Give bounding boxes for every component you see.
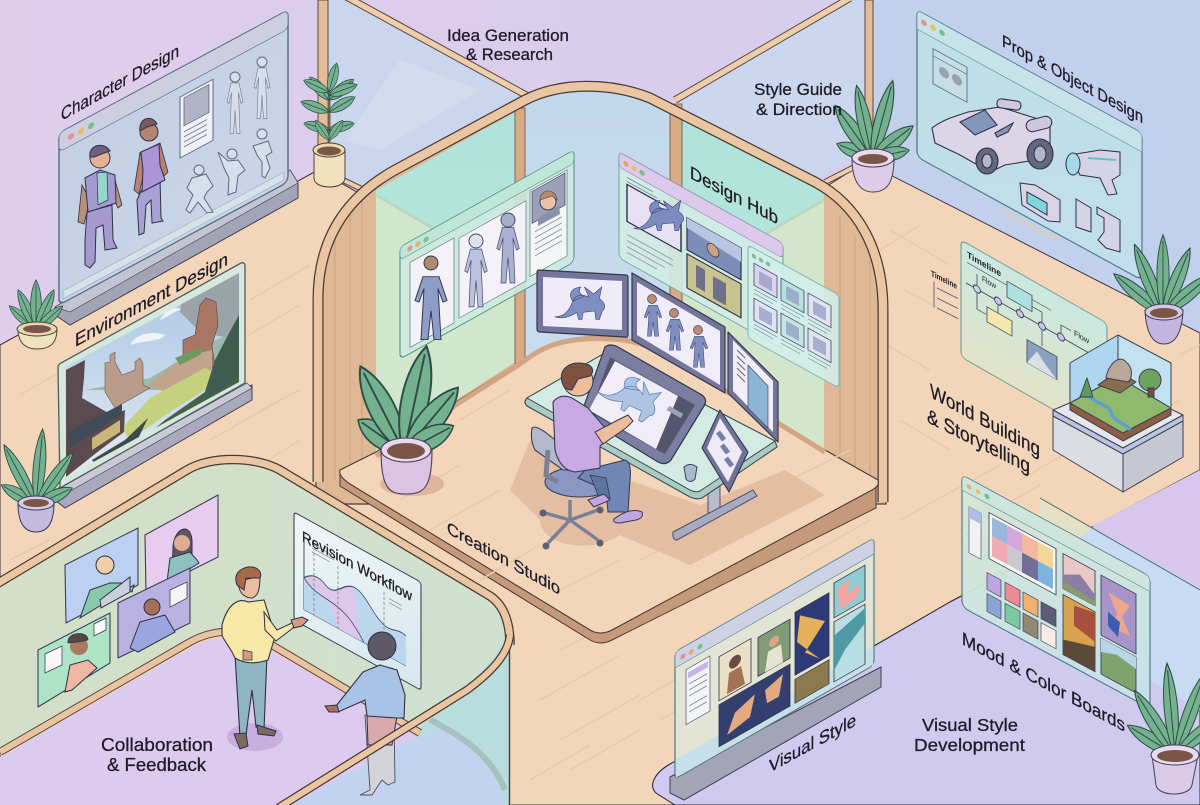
desk [525,353,777,540]
heading: collaboration and feedback [101,735,213,775]
panel: prop and object design [917,10,1142,280]
timeline note [931,268,958,320]
title: creation studio: Creation Studio [447,517,560,599]
profile card [180,79,213,158]
painting foreground buildings [66,360,125,477]
prop: handheld [1076,199,1120,252]
panel: visual style [670,538,881,800]
heading: style guide: & Direction [756,101,842,119]
person at drawing tablet [531,427,642,550]
room: collaboration [0,460,510,805]
heading: style guide [754,81,842,119]
thumbnail dragon [634,201,684,231]
title: character design: Character Design [61,41,179,126]
studio wall [316,82,886,504]
monitor: reference sheet [728,332,778,442]
glass right edge [508,640,510,805]
chair back [531,427,573,470]
panel: environment design [55,262,252,508]
panel: character design [55,10,298,325]
studio floor side [340,470,876,643]
monitor: dragon [537,270,628,337]
front floor seen through glass [285,730,505,805]
painting hills [86,336,239,390]
heading: idea generation: Idea Generation [447,27,569,45]
heading: visual style development: Development [914,735,1025,755]
hologram: storyboard panel [748,245,839,388]
top rim [0,460,510,645]
hologram: character sheets [400,150,574,359]
panel: timeline flow: Flow [982,274,997,291]
panel: timeline flow: Timeline [967,250,1002,280]
plant: right lavender pot [1110,235,1200,344]
desk leg [708,480,720,516]
title: mood and color boards: Mood & Color Boards [962,629,1125,737]
front glass [277,640,510,805]
floor: lavender corner [653,470,1200,805]
sketch figure 1 [415,256,447,340]
panel: timeline flow [931,240,1107,440]
room wall [0,462,508,750]
title: environment design: Environment Design [75,248,228,352]
painting meadow [122,368,214,440]
legs [578,460,630,512]
plant: fig tree [299,62,359,187]
tile: bearded man [118,568,190,658]
front rail top [278,635,510,805]
sketch figure 3 [497,213,519,283]
panel: mood and color boards [962,475,1150,709]
hill [1098,371,1136,393]
plant: left lavender pot [0,429,78,532]
plant: bottom right [1124,663,1200,794]
floor back rail [376,339,825,456]
plant: style guide [829,79,918,192]
painting dark hedge [156,375,239,428]
board title: Revision Workflow [302,528,412,605]
studio rim [318,86,883,502]
sketch figure 2 [465,234,487,307]
revision workflow board [294,512,421,690]
front rail [278,635,510,805]
monitor: character lineup [632,273,725,393]
tile: man with laptop [65,528,138,623]
heading: style guide: Style Guide [754,81,842,99]
character: girl [134,118,168,235]
studio floor [340,337,878,633]
centre glass [525,89,670,370]
plant: aloe [6,280,66,349]
chair base [545,500,598,543]
car [932,98,1053,174]
chair seat [545,467,615,497]
title: world building and storytelling: World Building [930,379,1040,462]
panel: timeline flow: Flow [1074,328,1090,346]
glass back [1070,335,1118,403]
back glass: mood boards [1040,498,1200,710]
desk tablet and cup [684,410,748,492]
person: presenter [222,567,308,751]
title: visual style: Visual Style [769,710,856,778]
heading: visual style development [914,715,1025,755]
floor shadow [510,440,825,565]
artwork details [729,652,741,671]
room floor [0,638,420,805]
prop: scanner [1020,183,1060,222]
base [55,170,298,325]
painting forest [205,315,239,395]
title: world building and storytelling: & Storytelling [927,405,1030,478]
prop: camera [1066,150,1120,195]
heading: idea generation: & Research [466,46,553,64]
painting rock [180,273,239,338]
person upper body [553,363,633,472]
painting left castle [105,352,150,408]
diorama [1053,335,1183,492]
glass posts [515,104,682,368]
shoes [588,494,642,523]
tile: woman with notes [38,613,110,707]
plant: studio [349,344,467,496]
left glass [376,112,515,452]
person: viewer [325,632,405,795]
back glass rooms [318,0,873,330]
heading: visual style development: Visual Style [922,715,1018,735]
wall bottom rail [0,632,420,752]
trees [1139,369,1161,391]
terrain [1070,403,1171,441]
hologram: design hub board [619,152,783,349]
timeline note: Timeline [931,268,957,291]
video call tiles [38,495,218,707]
pen display [582,345,706,464]
portrait [538,191,560,226]
environment painting [65,262,239,477]
ghost wall base [403,703,505,790]
right glass [682,110,824,452]
pose outlines [186,57,272,213]
painting right castle [183,298,218,374]
tile: woman [145,495,218,593]
heading: idea generation [447,27,569,64]
character: boy [78,145,122,268]
heading: collaboration and feedback: Collaboration [101,735,213,755]
title: prop and object design: Prop & Object Design [1002,30,1143,127]
heading: collaboration and feedback: & Feedback [107,755,207,775]
title: design hub: Design Hub [690,163,778,229]
creation studio [316,82,886,643]
